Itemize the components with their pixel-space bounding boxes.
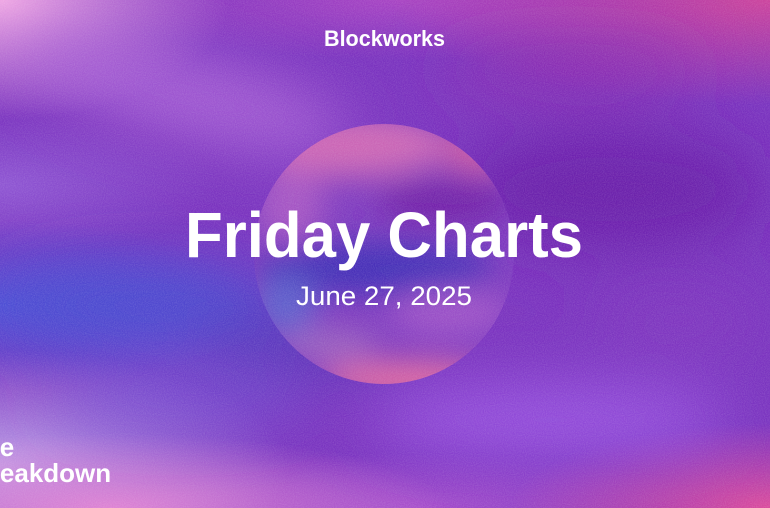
- sphere: [255, 124, 514, 384]
- date: June 27, 2025: [296, 281, 472, 311]
- title: Friday Charts: [185, 199, 583, 271]
- logo: Blockworks: Blockworks: [324, 26, 445, 51]
- show logo: The Breakdown: [0, 432, 111, 488]
